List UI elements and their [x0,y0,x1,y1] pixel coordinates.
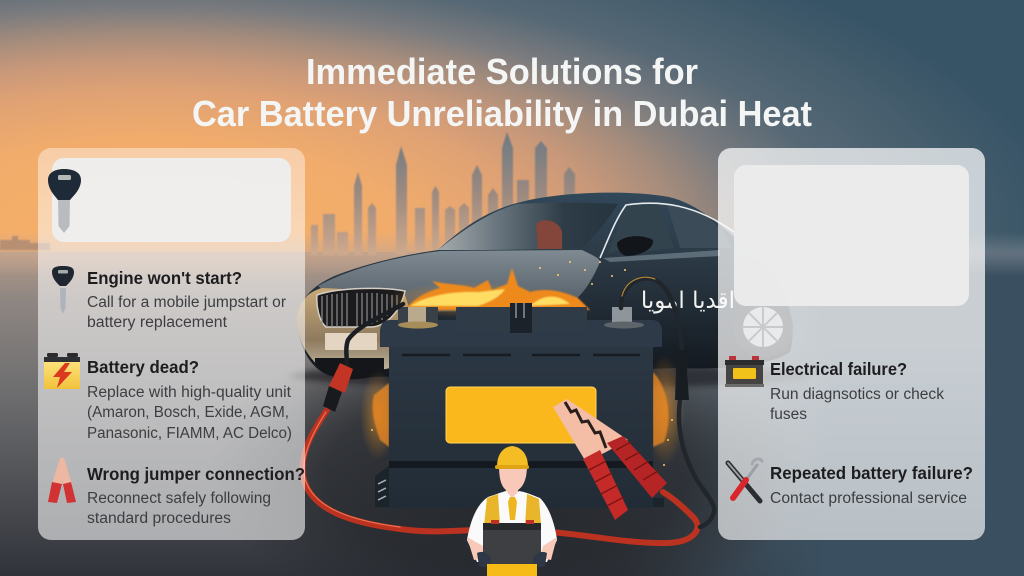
icon: wrench and screwdriver [728,459,762,501]
cable sleeve left [323,363,353,412]
item: battery dead: Battery dead? [87,357,199,377]
blank white box left [52,158,291,242]
item: electrical failure: Electrical failure? [770,359,907,379]
panel: left solutions [38,148,305,540]
car front wheel [315,358,384,379]
item: electrical failure: Run diagnsotics or check [770,386,944,403]
item: repeated battery failure: Repeated battery failure? [770,463,973,483]
icon: yellow battery with bolt [44,353,80,389]
title: Immediate Solutions for [306,51,698,92]
car [290,193,810,388]
item: battery dead [44,353,292,442]
battery base [375,466,664,507]
car front bumper [296,288,420,374]
item: wrong jumper connection: Reconnect safely following [87,490,271,507]
seats [536,220,562,249]
clamp handle back [607,436,667,498]
item: engine won't start [52,266,286,331]
left terminal [398,307,438,328]
battery case [389,347,653,508]
title: Car Battery Unreliability in Dubai Heat [192,93,812,134]
cable sleeve right [675,350,689,400]
icon: dark battery [725,356,764,387]
item: battery dead: (Amaron, Bosch, Exide, AGM, [87,404,289,421]
black cable left [346,304,403,366]
worker neck and face [499,465,527,497]
side mirror [617,236,653,256]
clamp handle front [583,450,628,520]
carried battery [483,520,541,564]
car grille [317,288,405,327]
blank white box right [734,165,969,306]
item: repeated battery failure [728,459,973,507]
icon: large car key [48,169,81,233]
car hood [318,250,600,312]
item: wrong jumper connection [48,458,305,527]
battery [375,303,664,508]
item: repeated battery failure: Contact professional service [770,490,967,507]
worker forearms [467,537,557,560]
worker tie [508,497,517,520]
item: engine won't start: Engine won't start? [87,268,242,288]
car plate [325,333,377,350]
right terminal [604,307,644,328]
windshield [438,202,618,250]
flames around the battery [360,261,685,466]
worker gloves [477,552,547,567]
red cable [303,410,698,543]
icon: jumper clamp [48,458,76,503]
black cable right [621,278,714,527]
item: wrong jumper connection: Wrong jumper connection? [87,464,305,484]
rear wheel [733,297,793,357]
icon: small car key [52,266,74,314]
battery centre cap [456,303,587,333]
worker holding battery [467,446,557,576]
Arabic lettering on car door: اقديا امويا [641,288,735,314]
car body [296,193,793,378]
item: battery dead: Panasonic, FIAMM, AC Delco) [87,425,292,442]
Dubai skyline [0,132,575,255]
item: wrong jumper connection: standard procedures [87,510,231,527]
battery yellow label [446,387,596,443]
item: battery dead: Replace with high-quality unit [87,384,292,401]
item: engine won't start: Call for a mobile jumpstart or [87,294,286,311]
item: electrical failure: fuses [770,406,807,423]
clamp jaws [553,399,628,462]
item: electrical failure [725,356,944,423]
panel: right solutions [718,148,985,540]
red battery clamps [553,399,667,520]
worker hard hat [495,446,529,469]
item: engine won't start: battery replacement [87,314,228,331]
worker shirt [467,491,557,562]
title [192,51,812,134]
door shine [603,250,720,262]
battery lid [380,320,662,347]
side windows [600,203,734,258]
worker overalls straps [484,494,541,525]
jumper cables [303,277,714,543]
worker trousers [487,564,537,576]
